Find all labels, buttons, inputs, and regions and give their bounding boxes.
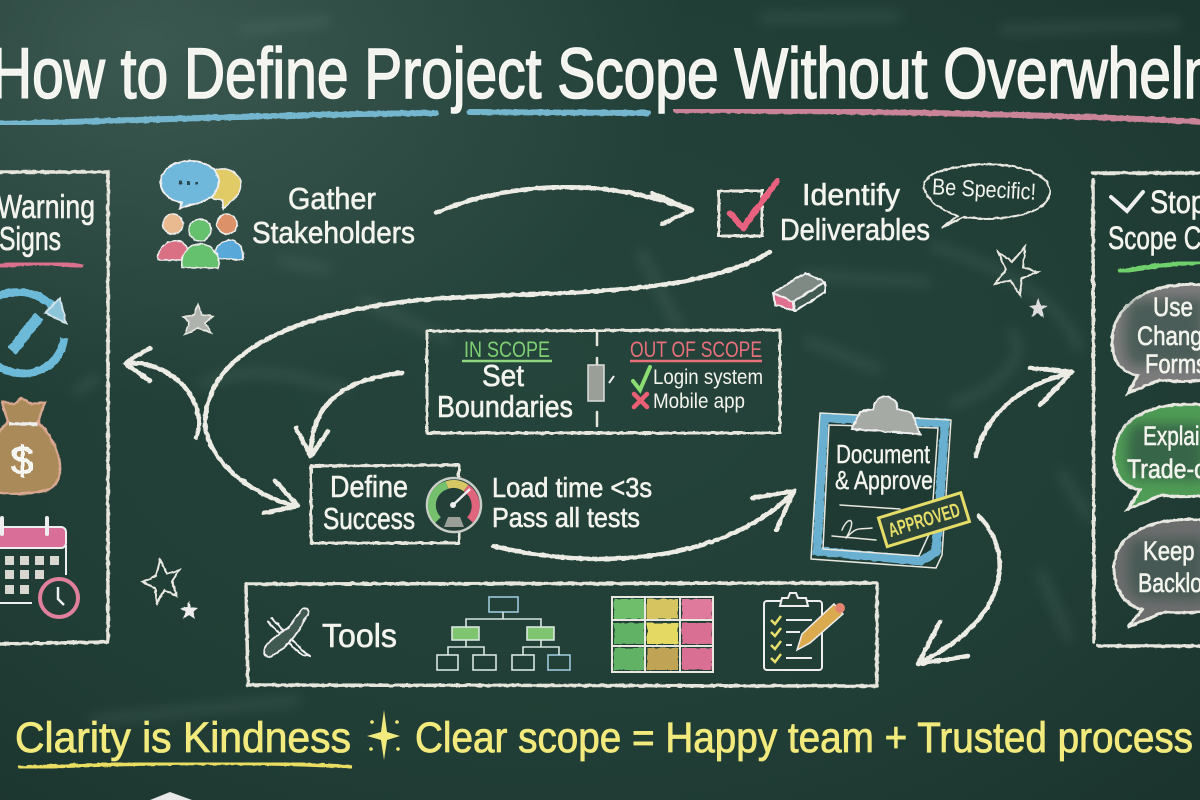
panel: define success: Success [323,501,415,536]
tools label: Tools [322,617,397,654]
icon: stars bottom left [143,560,198,619]
stamp: approved: APPROVED [886,499,963,542]
panel: define success [311,465,652,543]
out of scope label: OUT OF SCOPE [630,337,762,362]
icon: star left [183,304,213,335]
panel: stop scope creep [1093,173,1200,646]
step label: Gather [288,181,376,216]
arrow: to warning signs [125,348,199,438]
signature [832,505,900,540]
footer message [15,710,1193,768]
footer message: Clarity is Kindness [15,714,351,762]
panel: document and approve clipboard [811,396,969,568]
step label: Identify [802,177,900,212]
icon: checklist with pencil [764,593,845,670]
bubble: use change forms [1112,284,1200,393]
bubble: explain trade-offs [1114,404,1200,509]
step: gather stakeholders [158,161,415,268]
bubble: use change forms: Use [1153,292,1193,322]
panel: define success: Pass all tests [492,502,640,533]
icon: colour grid [612,597,713,672]
icon: calendar with clock [0,518,78,617]
icon: org chart [437,597,570,670]
stamp: approved [878,493,969,547]
icon: eraser [773,273,825,311]
panel: warning signs: Signs [0,220,61,257]
arrow: boundaries to define success [296,373,402,456]
panel: set boundaries: Boundaries [437,389,573,424]
arrow: document to tools [918,516,1000,664]
icon: clip [852,396,920,434]
clipboard label: Document [836,439,931,469]
arrow: deliverables to define success [205,252,770,513]
icon: checkbox [719,181,777,236]
heading [1111,192,1143,211]
icon: crossed tools [264,608,310,657]
callout: be specific [924,164,1050,227]
bubble: keep a backlog [1114,519,1200,627]
panel: set boundaries [427,330,780,433]
scope list: Mobile app [653,390,745,413]
step: identify deliverables: Deliverables [780,212,930,247]
arrow: define success to document [493,491,794,559]
icon: money bag [0,398,60,494]
icon: chalk piece [588,365,614,401]
icon: sparkle [367,710,400,760]
icon: stakeholders and speech bubbles [158,161,243,268]
scope list [633,366,763,413]
scope list: Login system [653,366,763,389]
arrow: gather to deliverables [436,187,692,224]
set boundaries label: Set [482,358,524,393]
step: gather stakeholders: Stakeholders [252,215,415,250]
in scope label: IN SCOPE [464,337,550,362]
panel: warning signs [0,172,108,644]
icon: money bag: $ [11,439,33,483]
arrow: document to stop scope creep [976,368,1072,456]
footer underline [18,763,352,768]
panel: document and approve clipboard: & Approve [835,465,933,495]
callout: be specific: Be Specific! [931,173,1037,205]
step: identify deliverables [719,177,930,247]
title underline [0,110,1200,124]
warning signs heading: Warning [0,188,95,225]
chalk at bottom edge [150,792,192,800]
icon: stars top right [995,247,1047,318]
metrics text: Load time <3s [492,472,652,503]
panel: tools [246,583,877,686]
step label: Define [330,469,408,504]
icon: gauge [427,478,481,532]
icon: circular arrows with slash [0,292,66,373]
